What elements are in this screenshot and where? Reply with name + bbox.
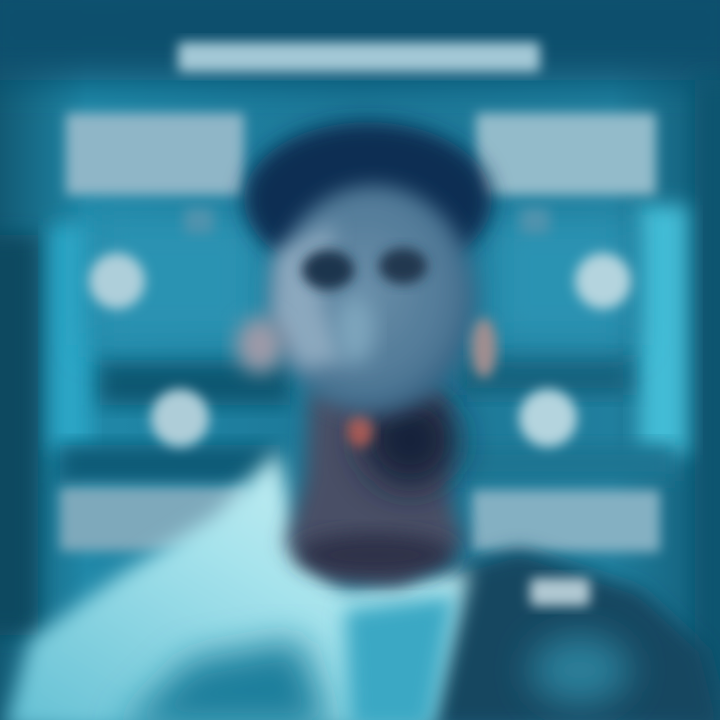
icon: circle upper right — [575, 253, 631, 309]
small marker: top right — [520, 208, 550, 234]
shirt centre — [345, 595, 455, 720]
panel: top right — [476, 113, 656, 195]
small marker: top left — [184, 208, 214, 234]
neck lower shadow — [295, 533, 455, 577]
jacket badge — [530, 578, 590, 606]
left cheek highlight — [272, 222, 345, 370]
hair — [244, 122, 492, 278]
left ear — [236, 317, 284, 373]
left eye — [302, 250, 354, 290]
jacket right side — [400, 550, 720, 720]
neck red accent — [347, 413, 373, 447]
panel: top left — [66, 113, 244, 195]
neck — [285, 390, 465, 585]
right eye — [379, 248, 427, 284]
jacket teal highlight — [530, 635, 630, 705]
title block — [178, 42, 540, 72]
panel: bottom right — [472, 490, 660, 552]
icon: circle lower left — [151, 389, 209, 447]
panel: bottom left — [60, 487, 250, 551]
face — [272, 185, 476, 415]
shirt left side — [5, 450, 470, 720]
shirt lower shade — [120, 640, 330, 720]
right ear — [471, 318, 497, 378]
nose — [335, 296, 375, 364]
neck shadow — [362, 392, 458, 488]
icon: circle upper left — [89, 253, 145, 309]
icon: circle lower right — [519, 389, 577, 447]
